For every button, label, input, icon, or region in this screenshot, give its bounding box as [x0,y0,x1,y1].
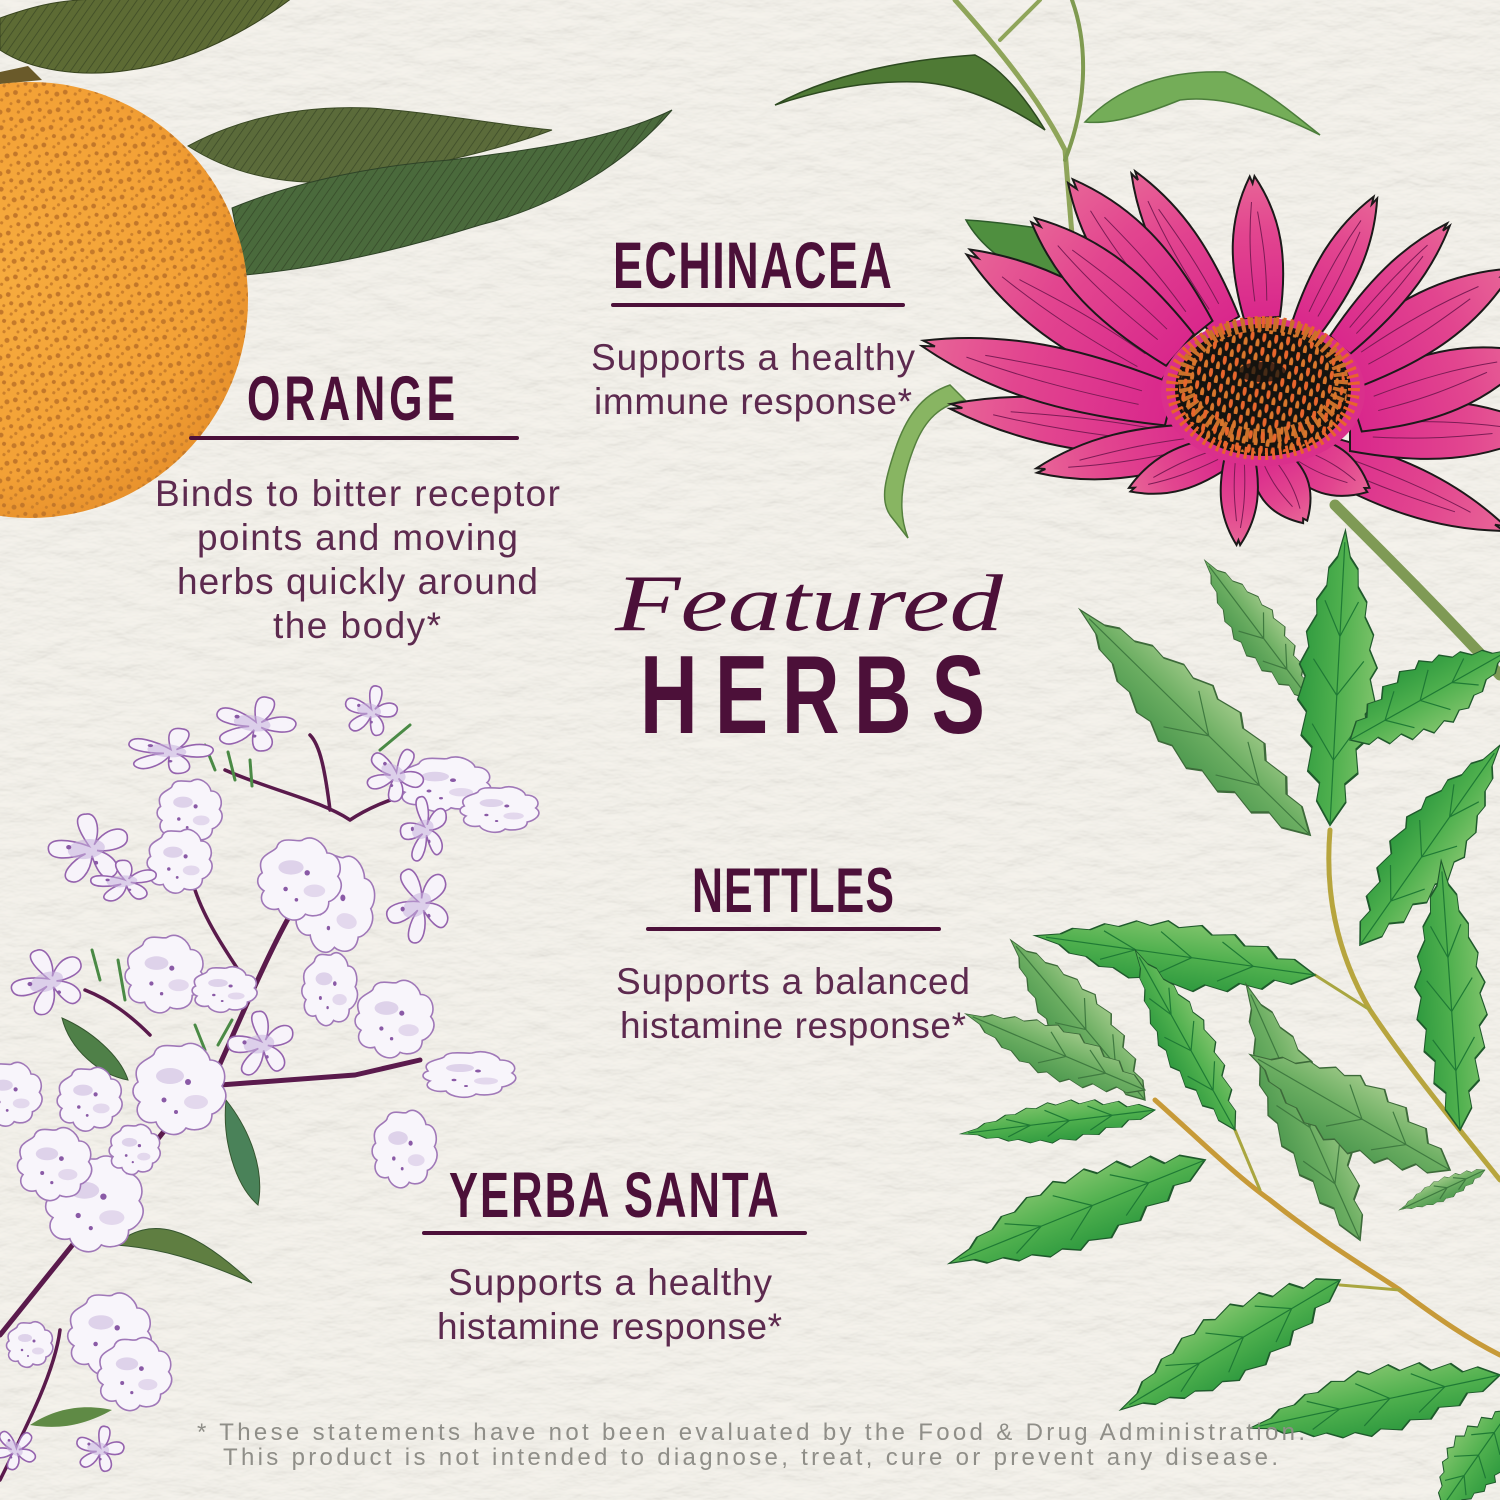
heading: NETTLES [692,856,894,926]
illustration: nettles [935,528,1500,1500]
description [591,337,916,422]
description: Binds to bitter receptor [155,473,560,514]
description: histamine response* [620,1005,966,1046]
footer disclaimer: * These statements have not been evaluated by the Food & Drug Administration. [197,1419,1305,1446]
description [437,1262,782,1347]
description: the body* [273,605,441,646]
illustration: echinacea [775,0,1500,675]
underline [424,1231,805,1235]
stems and upper leaves [775,0,1500,675]
footer disclaimer: This product is not intended to diagnose, treat, cure or prevent any disease. [223,1444,1278,1471]
nettle leaves [935,528,1500,1500]
section: nettles [616,856,970,1046]
orange peel speckles [0,82,248,518]
orange stem [0,66,42,84]
flower cone [1172,322,1354,456]
yerba santa leaves [30,1018,260,1427]
footer disclaimer [197,1419,1305,1471]
description: herbs quickly around [177,561,538,602]
nettle stems [1155,830,1500,1355]
description: Supports a healthy [448,1262,772,1303]
leaf: lower right of orange [232,110,672,275]
petals [916,161,1500,552]
description: points and moving [197,517,518,558]
illustration: yerba santa [0,681,539,1480]
leaf: top left [0,0,292,73]
description [616,961,970,1046]
description: Supports a balanced [616,961,970,1002]
illustration: orange with leaves [0,0,672,518]
yerba santa stems [0,725,430,1480]
description: immune response* [594,381,912,422]
underline [648,927,939,931]
description [155,473,560,646]
section: echinacea [591,228,916,422]
script line: Featured [614,560,1004,648]
section: yerba santa [424,1159,805,1347]
underline [613,303,903,307]
leaf: upper right of orange [188,108,552,182]
orange fruit [0,82,248,518]
description: histamine response* [437,1306,782,1347]
underline [191,436,517,440]
heading: ORANGE [247,364,455,434]
heading: YERBA SANTA [449,1159,779,1231]
description: Supports a healthy [591,337,916,378]
section: orange [155,364,560,646]
yerba santa flower masses [0,757,539,1411]
heading: ECHINACEA [613,228,892,302]
title: Featured Herbs [614,560,1004,757]
yerba santa flowers [0,681,462,1477]
block line: HERBS [640,633,985,757]
